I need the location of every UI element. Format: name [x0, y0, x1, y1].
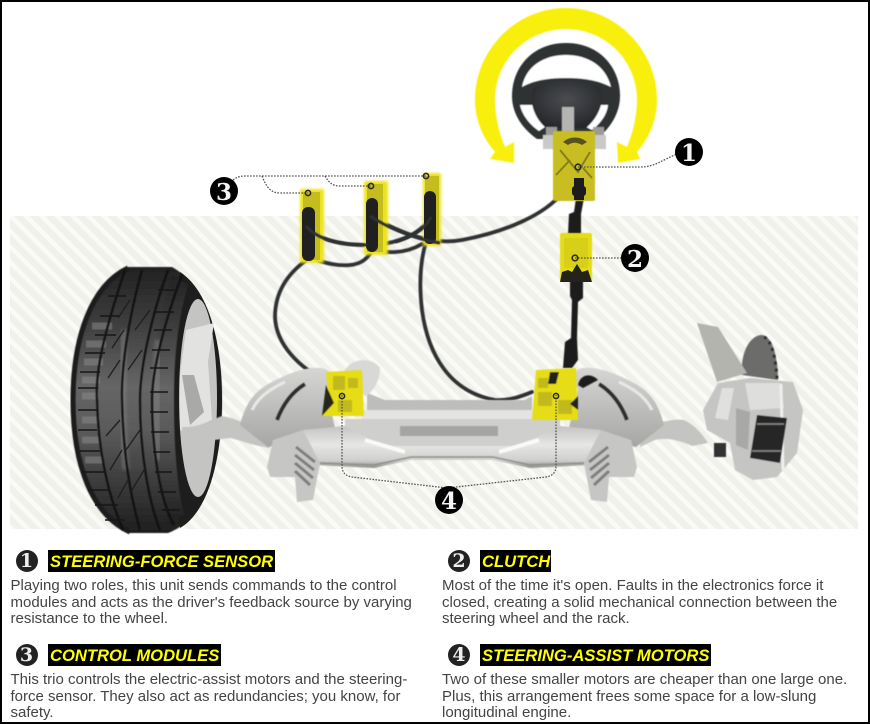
rear bar [367, 393, 532, 412]
tyre [72, 267, 222, 533]
text block: steering-force sensor [10, 550, 412, 627]
text block: clutch: 2 [452, 550, 466, 572]
tyre grooves [97, 270, 182, 530]
centre panel [345, 419, 560, 446]
left control arm [182, 416, 270, 448]
text block: steering-force sensor: modules and acts as the driver's feedback source by varying [10, 594, 412, 611]
badge 2 [621, 244, 649, 273]
leader line: sensor to badge 1 [578, 154, 677, 167]
badge 1 [675, 138, 703, 167]
tyre sidewall [170, 272, 222, 528]
rim [179, 299, 217, 497]
tyre sipes [78, 290, 180, 520]
yellow highlight: clutch [560, 233, 592, 282]
text block: steering-force sensor: Playing two roles, this unit sends commands to the control [10, 577, 397, 594]
leader lines: modules to badge 3 [233, 176, 426, 193]
yellow highlight: steering-force sensor [553, 131, 595, 201]
text block: steering-force sensor: resistance to the wheel. [10, 610, 168, 627]
text block: steering-assist motors: Two of these smaller motors are cheaper than one large one. [442, 671, 847, 688]
text block: steering-assist motors [442, 644, 847, 721]
tyre left edge [73, 268, 130, 532]
yellow highlight: left motor [322, 370, 364, 416]
brake pads [750, 415, 787, 463]
left leg [267, 430, 320, 502]
steering shaft [563, 198, 584, 368]
text block: control modules: CONTROL MODULES [50, 646, 219, 665]
leader lines: motors to badge 4 [342, 395, 556, 488]
control module cables [275, 192, 563, 400]
left dome [240, 368, 335, 447]
right dome [569, 368, 664, 447]
subframe crossmember [240, 360, 664, 502]
tyre tread highlights [82, 326, 112, 460]
backing plate [697, 323, 747, 382]
right leg [584, 430, 637, 502]
badge 4: 4 [441, 488, 457, 515]
front cables over modules [306, 216, 440, 245]
hatched background panel [10, 216, 858, 529]
badge 3: 3 [216, 179, 232, 206]
text block: control modules: safety. [10, 704, 54, 721]
yellow highlight: control modules [300, 173, 441, 263]
badge 2: 2 [627, 246, 643, 273]
text block: control modules [10, 644, 407, 721]
text block: steering-assist motors: Plus, this arrangement frees some space for a low-slung [442, 688, 816, 705]
left motor housing [344, 360, 380, 396]
steering column [562, 107, 574, 133]
text block: steering-assist motors: longitudinal engine. [442, 704, 571, 721]
tyre shoulder blocks [153, 275, 188, 525]
right control arm [640, 420, 708, 447]
text block: clutch: Most of the time it's open. Faults in the electronics force it [442, 577, 823, 594]
text block: clutch: CLUTCH [482, 552, 550, 571]
brake disc [742, 335, 778, 380]
text block: control modules: force sensor. They also act as redundancies; you know, for [10, 688, 400, 705]
target ring markers [305, 164, 581, 399]
text block: control modules: 3 [20, 644, 33, 666]
hub knuckle [180, 323, 214, 432]
badge 3 [210, 177, 238, 206]
steering wheel [512, 43, 620, 149]
text block: steering-assist motors: STEERING-ASSIST MOTORS [482, 646, 709, 665]
text block: clutch: closed, creating a solid mechanical connection between the [442, 594, 837, 611]
text block: steering-assist motors: 4 [452, 644, 466, 666]
leader line: clutch to badge 2 [575, 257, 624, 259]
text block: steering-force sensor: 1 [20, 550, 33, 572]
wheel and tyre [72, 267, 222, 533]
right brake assembly [640, 323, 803, 480]
badge 4 [435, 486, 463, 515]
icon: yellow rotation arrows [475, 8, 657, 163]
text block: clutch [442, 550, 837, 627]
yellow highlight: right motor [532, 368, 598, 420]
text block: steering-force sensor: STEERING-FORCE SENSOR [50, 552, 273, 571]
caliper [703, 378, 803, 480]
text block: clutch: steering wheel and the rack. [442, 610, 630, 627]
lower beam [303, 426, 601, 468]
badge 1: 1 [681, 140, 697, 167]
text block: control modules: This trio controls the electric-assist motors and the steering- [10, 671, 407, 688]
